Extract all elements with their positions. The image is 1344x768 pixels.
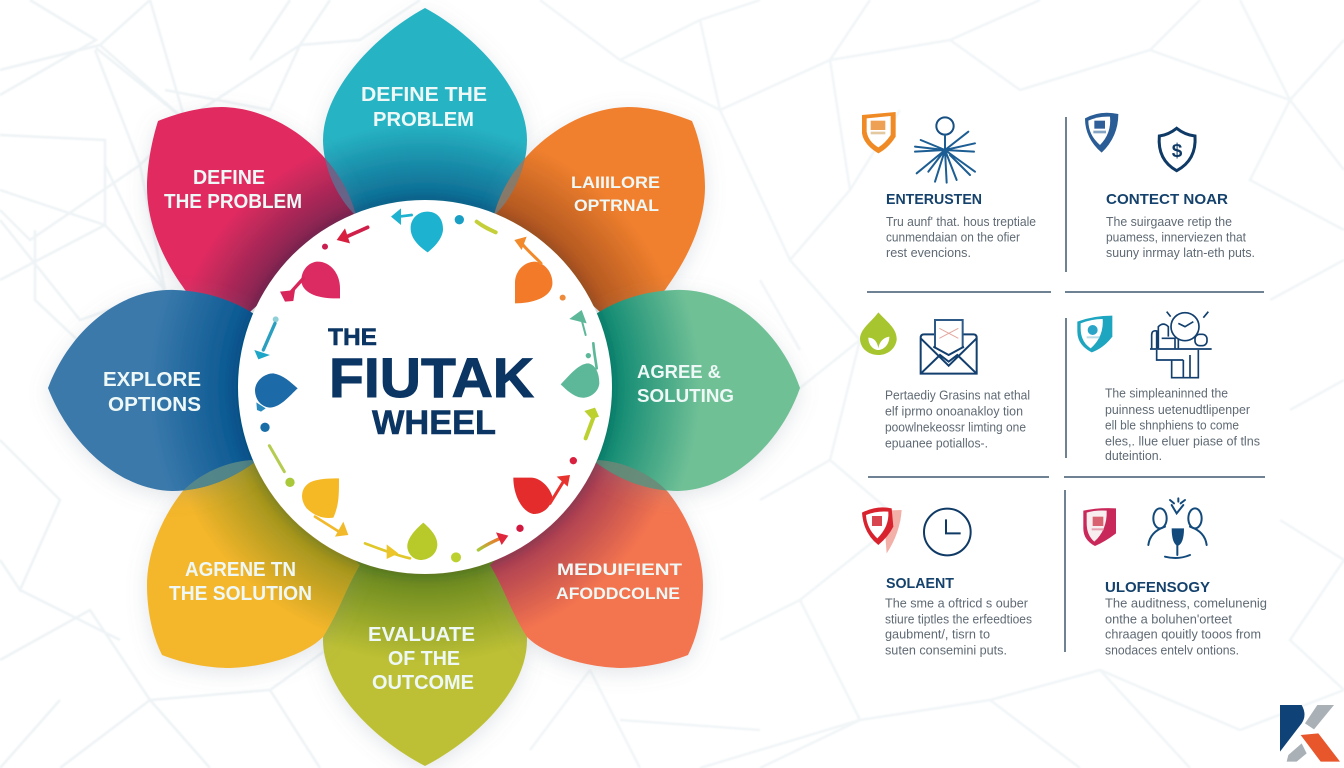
heading: ULOFENSOGY	[1105, 579, 1210, 596]
label: pink petal: DEFINE	[193, 167, 265, 189]
icon: green drop and arrow	[561, 310, 599, 398]
petal: blue left	[48, 290, 260, 491]
panel: middle right item	[1077, 312, 1260, 463]
petal labels	[103, 84, 734, 694]
icon: lime dot and stroke	[269, 446, 295, 487]
icon: radiating figure	[915, 117, 975, 183]
icon: lime drop	[365, 523, 461, 562]
label: pink petal	[164, 167, 302, 213]
label: teal petal	[361, 84, 487, 131]
body text: rest evencions.	[886, 246, 971, 260]
body text: stiure tiptles the erfeedtioes	[885, 612, 1032, 626]
label: red petal: AFODDCOLNE	[556, 584, 680, 603]
label: yellow petal: THE SOLUTION	[169, 583, 312, 605]
icon: yellow drop and arrow	[302, 478, 348, 537]
badge: blue shield	[1085, 113, 1118, 153]
body text: puinness uetenudtlipenper	[1105, 403, 1250, 417]
panel: top left item	[862, 112, 1036, 260]
body text	[1105, 596, 1267, 658]
title: WHEEL: WHEEL	[372, 404, 496, 442]
petal: green right	[590, 290, 800, 491]
icon: teal arrow	[254, 316, 279, 359]
icon: small multicolour arrow	[478, 525, 524, 550]
body text: gaubment/, tisrn to	[885, 628, 990, 642]
body text	[886, 215, 1036, 260]
body text: suten consemini puts.	[885, 644, 1007, 658]
label: yellow petal: AGRENE TN	[185, 559, 296, 581]
label: blue petal: OPTIONS	[108, 394, 201, 416]
centre circle	[238, 200, 612, 574]
icon: orange drop and arrow	[514, 237, 566, 303]
icon: dollar shield: $	[1172, 141, 1183, 162]
icon: clock	[924, 509, 971, 555]
body text: The auditness, comelunenig	[1105, 596, 1267, 610]
dividers	[867, 117, 1265, 652]
body text	[1106, 215, 1255, 260]
badge: orange shield	[862, 112, 896, 153]
badge: teal shield	[1077, 316, 1112, 352]
panel: middle left item	[860, 312, 1030, 450]
icon: small teal dot and lime pill	[455, 215, 496, 232]
icon: two people and cup	[1148, 498, 1207, 558]
badge: red shield	[862, 507, 902, 553]
label: olive petal	[368, 624, 475, 694]
label: green petal: SOLUTING	[637, 386, 734, 406]
label: green petal	[637, 362, 734, 406]
body text: ell ble shnphiens to come	[1105, 418, 1239, 432]
icon: desk and clock	[1150, 312, 1212, 378]
label: pink petal: THE PROBLEM	[164, 191, 302, 213]
petal: olive bottom	[323, 560, 527, 766]
body text: suuny inrmay latn-eth puts.	[1106, 246, 1255, 260]
icon: lime arrow	[584, 408, 599, 438]
body text: poowlnekeossr limting one	[885, 420, 1026, 434]
icon: teal drop and arrow	[391, 208, 443, 252]
body text: onthe a boluhen'orteet	[1105, 612, 1233, 626]
heading: SOLAENT	[886, 575, 954, 592]
body text	[885, 388, 1030, 450]
label: red petal	[556, 560, 683, 603]
wheel title	[328, 324, 534, 442]
body text: chraagen qouitly tooos from	[1105, 628, 1261, 642]
heading: ENTERUSTEN	[886, 191, 982, 208]
icon: blue drop	[255, 373, 298, 432]
petal: orange upper right	[494, 107, 705, 312]
corner logo	[1280, 705, 1340, 762]
petal overlaps	[184, 158, 666, 490]
label: olive petal: EVALUATE	[368, 624, 475, 646]
heading: CONTECT NOAR	[1106, 191, 1228, 208]
label: red petal: MEDUIFIENT	[557, 560, 683, 579]
label: blue petal: EXPLORE	[103, 369, 201, 391]
body text: The simpleaninned the	[1105, 386, 1228, 400]
petal: yellow lower left	[147, 460, 360, 668]
label: green petal: AGREE &	[637, 362, 721, 382]
icon: red drop and arrow	[513, 457, 577, 514]
body text: Pertaediy Grasins nat ethal	[885, 388, 1030, 402]
label: teal petal: DEFINE THE	[361, 84, 487, 106]
body text: duteintion.	[1105, 449, 1162, 463]
icon: red arrow	[337, 227, 368, 243]
label: orange petal	[571, 173, 660, 215]
label: orange petal: LAIIILORE	[571, 173, 660, 192]
panel: bottom right item	[1083, 498, 1267, 658]
panel: bottom left item	[862, 507, 1032, 658]
body text	[1105, 386, 1260, 463]
label: yellow petal	[169, 559, 312, 605]
body text: epuanee potiallos-.	[885, 436, 988, 450]
label: olive petal: OF THE	[388, 648, 460, 670]
flower wheel petals	[48, 8, 800, 766]
body text: eles,. llue eluer piase of tlns	[1105, 434, 1260, 448]
body text: cunmendaian on the ofier	[886, 230, 1020, 244]
body text	[885, 596, 1032, 658]
badge: crimson shield	[1083, 508, 1116, 546]
label: blue petal	[103, 369, 201, 416]
body text: puamess, innerviezen that	[1106, 230, 1247, 244]
body text: The sme a oftricd s ouber	[885, 596, 1028, 610]
title: THE: THE	[328, 324, 377, 351]
body text: snodaces entelv ontions.	[1105, 644, 1239, 658]
petal: red lower right	[490, 460, 703, 668]
body text: elf iprmo onoanakloy tion	[885, 404, 1023, 418]
panel: top right item	[1085, 113, 1255, 260]
body text: Tru aunf' that. hous treptiale	[886, 215, 1036, 229]
icon: dollar shield	[1159, 128, 1195, 171]
petal: pink upper left	[147, 107, 356, 312]
badge: green leaf drop	[860, 312, 897, 355]
icon: envelope	[921, 320, 977, 374]
label: teal petal: PROBLEM	[373, 109, 474, 131]
petal: teal top	[323, 8, 527, 215]
title: FIUTAK: FIUTAK	[329, 346, 534, 409]
icon: pink drop and arrow	[280, 244, 340, 302]
label: olive petal: OUTCOME	[372, 672, 474, 694]
wheel icons ring	[254, 208, 599, 562]
body text: The suirgaave retip the	[1106, 215, 1232, 229]
label: orange petal: OPTRNAL	[574, 196, 659, 215]
